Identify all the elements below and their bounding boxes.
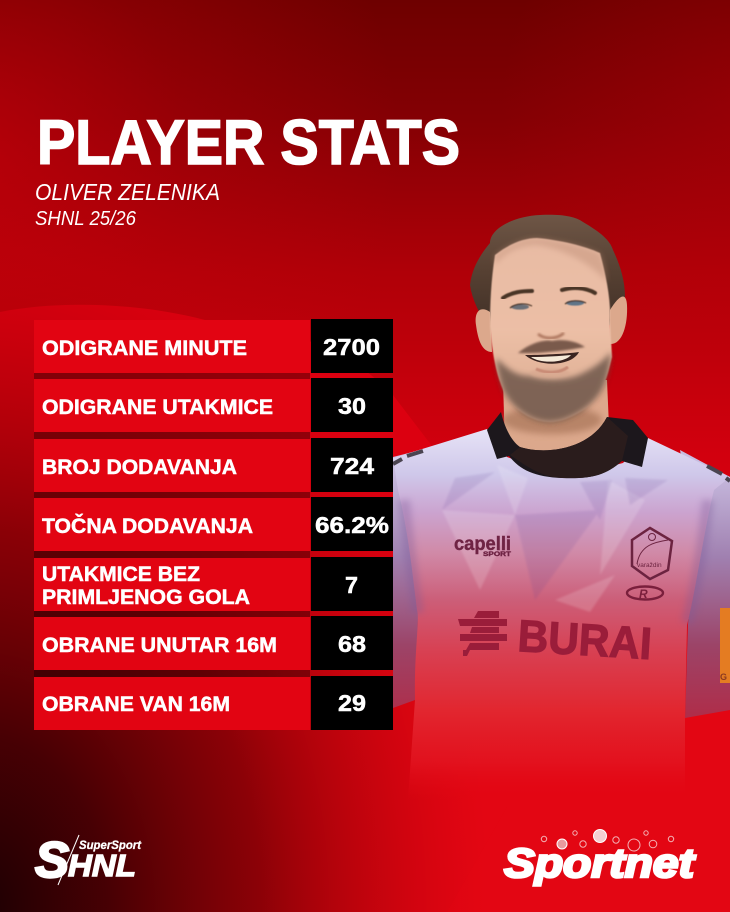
stat: odigrane minute: ODIGRANE MINUTE — [42, 337, 247, 360]
badge: capelli sport: SPORT — [483, 551, 511, 558]
row gap shadows — [34, 373, 310, 677]
collar — [487, 412, 648, 478]
logo: SuperSport SHNL: S — [35, 832, 69, 888]
stat: utakmice bez primljenog gola: PRIMLJENOG GOLA — [42, 586, 250, 609]
season: SHNL 25/26 — [35, 208, 137, 230]
sponsor: BURAI: BURAI — [516, 610, 653, 669]
stat: odigrane minute — [34, 319, 393, 373]
stat: odigrane utakmice — [34, 378, 393, 432]
player name: OLIVER ZELENIKA — [35, 179, 220, 205]
sponsor mark: R — [639, 587, 648, 601]
jersey — [393, 429, 730, 800]
sleeve patch: G — [720, 672, 727, 682]
stat: obrane van 16m: OBRANE VAN 16M — [42, 693, 230, 716]
chin patch — [530, 368, 570, 378]
nose — [538, 333, 564, 338]
ears — [476, 297, 627, 352]
shoulder stripes — [393, 451, 730, 481]
sponsor mark — [627, 586, 663, 601]
moustache — [518, 340, 585, 353]
stat: odigrane minute: 2700 — [323, 334, 380, 360]
background wave — [0, 305, 432, 640]
stat: broj dodavanja — [34, 438, 393, 492]
stats table — [34, 319, 393, 730]
club crest: varaždin — [637, 562, 662, 569]
stat: obrane unutar 16m — [34, 616, 393, 670]
stat: tocna dodavanja — [34, 497, 393, 551]
stat: tocna dodavanja: TOČNA DODAVANJA — [42, 514, 253, 538]
logo: SuperSport SHNL — [35, 832, 142, 888]
stat: obrane van 16m — [34, 676, 393, 730]
sponsor: BURAI — [458, 610, 653, 669]
sport ball bubbles — [541, 830, 674, 851]
player photo — [393, 215, 730, 800]
badge: capelli sport: capelli — [454, 534, 511, 555]
stat: utakmice bez primljenog gola — [34, 557, 393, 611]
stat: obrane unutar 16m: OBRANE UNUTAR 16M — [42, 634, 277, 657]
jersey facets — [442, 465, 645, 612]
stat: utakmice bez primljenog gola: 7 — [345, 572, 358, 598]
title: PLAYER STATS — [37, 108, 460, 178]
sleeves — [393, 445, 730, 718]
sleeve patch — [720, 608, 730, 683]
neck — [502, 380, 610, 478]
stat: obrane van 16m: 29 — [338, 690, 366, 716]
stat: obrane unutar 16m: 68 — [338, 631, 366, 657]
stat: broj dodavanja: 724 — [330, 453, 374, 479]
smile — [525, 352, 579, 372]
eyes — [510, 300, 586, 310]
logo: Sportnet: Sportnet — [504, 840, 697, 886]
stat: odigrane utakmice: ODIGRANE UTAKMICE — [42, 396, 273, 419]
beard — [496, 352, 611, 422]
hair — [470, 215, 625, 330]
brows — [503, 288, 595, 298]
forehead shadow — [495, 238, 607, 282]
stat: utakmice bez primljenog gola: UTAKMICE BEZ — [42, 563, 200, 586]
face — [490, 238, 612, 422]
stat: tocna dodavanja: 66.2% — [315, 512, 389, 538]
club crest — [632, 528, 672, 579]
logo: SuperSport SHNL: SuperSport — [79, 838, 142, 852]
stat: odigrane utakmice: 30 — [338, 393, 366, 419]
logo: SuperSport SHNL: HNL — [68, 848, 136, 883]
stat: broj dodavanja: BROJ DODAVANJA — [42, 456, 237, 479]
